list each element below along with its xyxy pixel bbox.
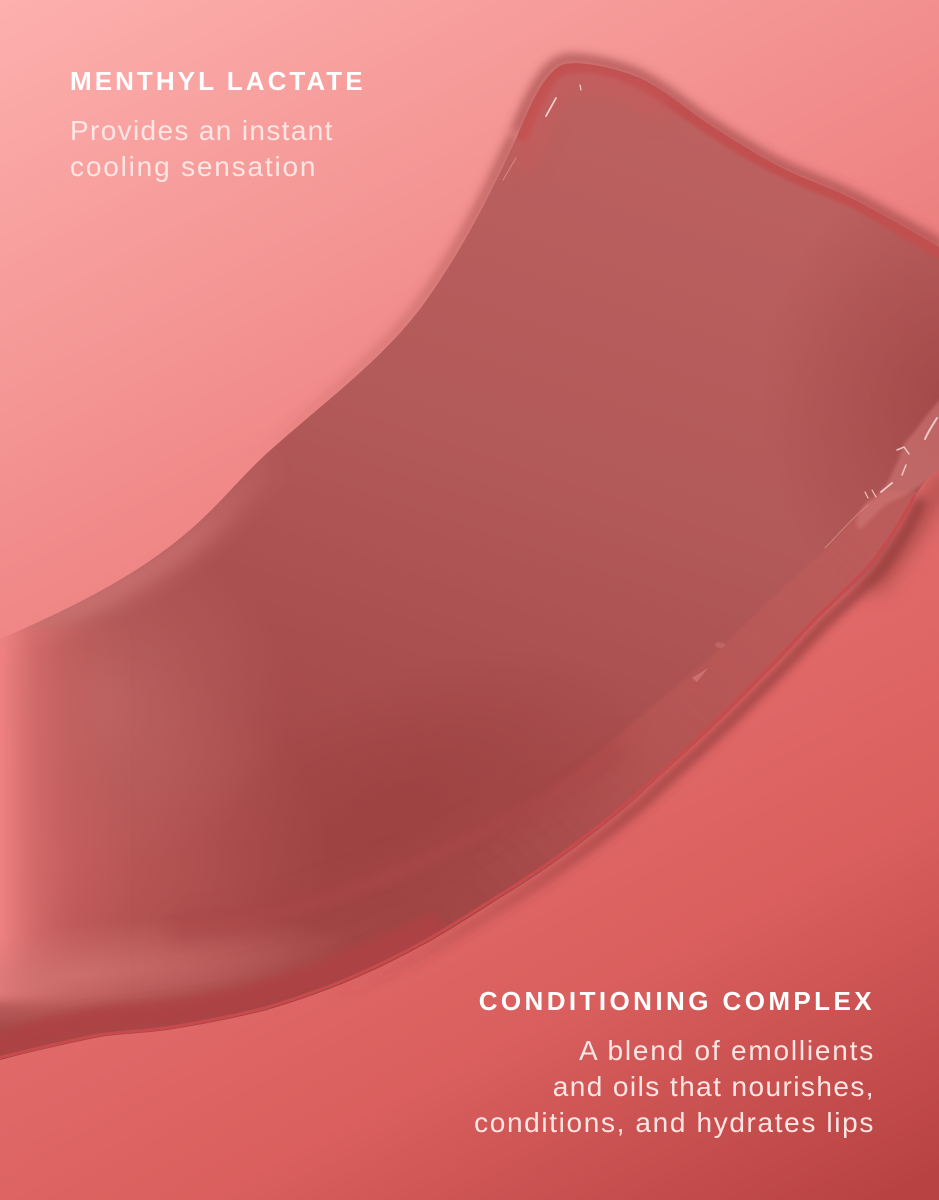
gel drop shadow: top edge	[515, 59, 939, 246]
heading: menthyl lactate: MENTHYL LACTATE	[70, 66, 366, 96]
lower left band	[0, 934, 298, 1018]
lower right clear band	[591, 492, 917, 812]
right side darkening	[838, 251, 939, 492]
callout: conditioning complex	[474, 986, 875, 1138]
glints: knot	[825, 418, 937, 548]
gel drop shadow: beneath knot	[870, 470, 939, 590]
knot of clear gel	[856, 395, 939, 530]
crease shadow	[186, 933, 203, 936]
lower left warm body	[49, 770, 258, 951]
crease line	[170, 725, 640, 928]
gel drop shadow: lower right edge	[330, 499, 922, 996]
bottom rim band	[0, 922, 440, 1048]
heading: conditioning complex: CONDITIONING COMPLEX	[479, 986, 875, 1016]
text: conditioning complex description: A blend of emollients	[579, 1035, 875, 1066]
text: conditioning complex description	[474, 1035, 875, 1138]
glints: clear band	[692, 642, 725, 682]
callout: menthyl lactate	[70, 66, 366, 182]
lower right rim line	[0, 495, 915, 1058]
gel drop shadow: left edge	[262, 135, 514, 453]
text: conditioning complex description: conditions, and hydrates lips	[474, 1107, 875, 1138]
dark belly	[109, 582, 691, 1038]
text: conditioning complex description: and oils that nourishes,	[553, 1071, 875, 1102]
upper left soft edge	[22, 480, 250, 630]
rim: top edge	[520, 66, 939, 255]
text: menthyl lactate description: Provides an instant	[70, 115, 334, 146]
text: menthyl lactate description	[70, 115, 334, 182]
text: menthyl lactate description: cooling sensation	[70, 151, 317, 182]
left edge highlight	[0, 626, 88, 1004]
glints: top corner	[503, 85, 581, 180]
soft haze behind top corner	[520, 79, 665, 170]
left body glow	[66, 606, 223, 790]
